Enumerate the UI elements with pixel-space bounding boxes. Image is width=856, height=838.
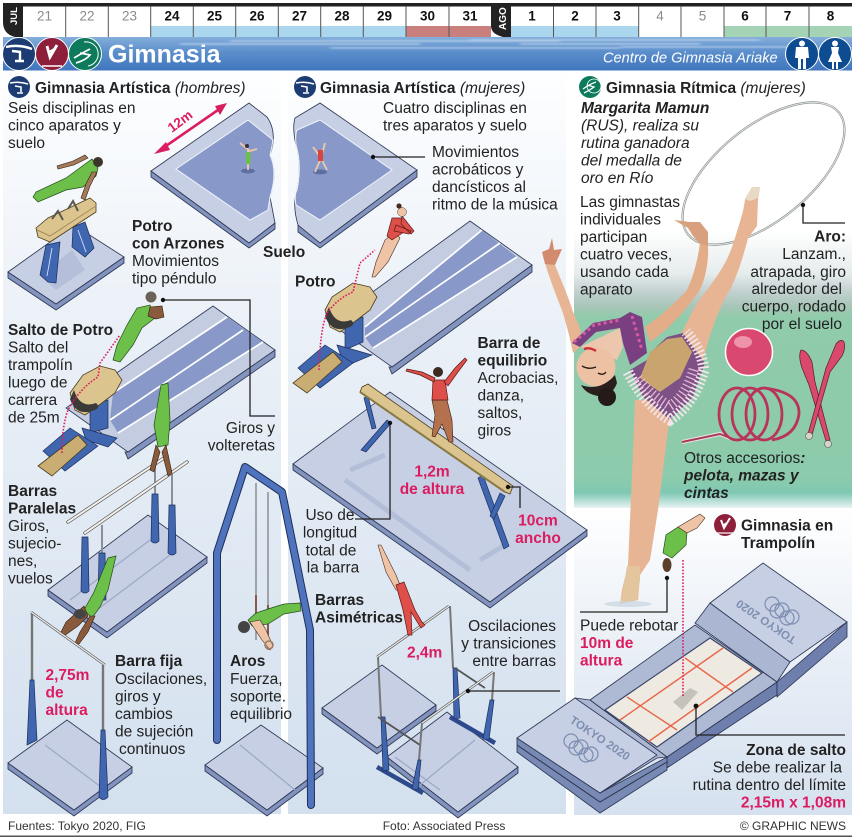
floor note: acrobáticos y bbox=[432, 162, 524, 178]
label: high bar: Oscilaciones, bbox=[115, 671, 207, 688]
hoop label: atrapada, giro bbox=[750, 264, 846, 281]
accessories text: Otros accesorios: bbox=[684, 450, 805, 467]
date calendar strip bbox=[3, 3, 852, 37]
icon: rhythmic badge bbox=[68, 38, 102, 70]
raised arm bbox=[645, 243, 708, 342]
label: jump zone: rutina dentro del límite bbox=[693, 777, 846, 794]
intro text: Cuatro disciplinas en bbox=[383, 100, 527, 117]
label: vault: Potro bbox=[295, 274, 335, 290]
label: beam: saltos, bbox=[478, 405, 522, 422]
date calendar strip: AGO bbox=[498, 7, 509, 30]
label: jump zone: Se debe realizar la bbox=[713, 760, 842, 776]
men's vault illustration bbox=[38, 292, 275, 476]
label: 2,75m: 2,75m bbox=[46, 667, 89, 684]
trampoline illustration bbox=[517, 514, 847, 813]
rings illustration bbox=[205, 467, 323, 816]
date calendar strip: 31 bbox=[462, 8, 478, 24]
label: beam: danza, bbox=[478, 388, 524, 405]
bed bbox=[605, 638, 762, 747]
label: vault: Salto del bbox=[8, 340, 68, 357]
label: bar length: longitud bbox=[303, 525, 357, 542]
intro text: suelo bbox=[8, 135, 45, 152]
frame bbox=[667, 682, 777, 768]
heading: Gimnasia Artística (hombres) bbox=[35, 80, 246, 97]
panel: trampoline bbox=[517, 514, 847, 813]
date calendar strip: 23 bbox=[122, 8, 137, 24]
floor note: dancísticos al bbox=[432, 179, 526, 196]
end block: far bbox=[695, 563, 847, 697]
athlete text: Las gimnastas bbox=[580, 194, 680, 211]
label: vault: de 25m bbox=[8, 410, 60, 427]
label: bar length: Uso de bbox=[305, 507, 355, 524]
hoop label: cuerpo, rodado bbox=[742, 299, 846, 316]
gymnast bbox=[240, 143, 257, 170]
other arm bbox=[545, 263, 582, 353]
gymnast bbox=[372, 203, 414, 277]
panel: women's artistic gymnastics bbox=[263, 76, 587, 818]
photo credit: Foto: Associated Press bbox=[383, 819, 505, 833]
date calendar strip: 2 bbox=[571, 8, 579, 24]
label: beam: Acrobacias, bbox=[478, 370, 558, 387]
athlete credit: (RUS), realiza su bbox=[581, 118, 699, 135]
date calendar strip: 4 bbox=[656, 8, 664, 24]
date calendar strip: 27 bbox=[292, 8, 307, 24]
icon: artistic men badge bbox=[2, 38, 36, 70]
handstand gymnast bbox=[150, 383, 172, 476]
athlete text: participan bbox=[580, 229, 647, 246]
standing leg bbox=[620, 400, 673, 604]
label: twists: Giros y bbox=[226, 420, 275, 437]
date calendar strip: 24 bbox=[164, 8, 180, 24]
date calendar strip: JUL bbox=[9, 7, 20, 25]
label: uneven bars: Asimétricas bbox=[315, 610, 403, 627]
label: rings: Fuerza, bbox=[230, 671, 283, 688]
connector: width bbox=[506, 485, 520, 508]
floor note: Movimientos bbox=[432, 144, 519, 161]
label: beam: Barra de bbox=[478, 335, 540, 352]
face bbox=[576, 348, 616, 386]
raised leg bbox=[682, 187, 760, 360]
hoop label: por el suelo bbox=[762, 316, 842, 333]
athlete text: individuales bbox=[580, 212, 661, 228]
gymnast bbox=[313, 143, 327, 172]
title band bbox=[2, 37, 852, 70]
uneven bars illustration bbox=[322, 545, 560, 818]
footer bbox=[0, 819, 852, 837]
gymnast bbox=[378, 545, 425, 635]
label: parallel bars: nes, bbox=[8, 553, 37, 570]
label: vault: luego de bbox=[8, 375, 67, 392]
women's vault illustration bbox=[293, 203, 532, 393]
label: beam: giros bbox=[478, 423, 511, 440]
connector: rebound bbox=[580, 576, 669, 612]
end block: near: TOKYO 2020 bbox=[567, 715, 632, 763]
connector: jump zone bbox=[694, 704, 845, 735]
label: rebound: altura bbox=[580, 653, 623, 670]
label: high bar: de sujeción bbox=[115, 724, 193, 740]
label: rebound: Puede rebotar bbox=[580, 618, 678, 635]
gymnast bbox=[33, 155, 103, 202]
icon: women's heading badge bbox=[294, 76, 316, 98]
date calendar strip: 6 bbox=[741, 8, 749, 24]
icon: ribbon bbox=[682, 388, 799, 442]
label: rebound: 10m de bbox=[580, 635, 634, 652]
hoop bbox=[659, 76, 856, 271]
label: beam: equilibrio bbox=[478, 353, 547, 370]
connector: bar length bbox=[355, 421, 392, 519]
icon: men's heading badge bbox=[8, 76, 30, 98]
label: 2,75m: altura bbox=[46, 702, 88, 719]
label: bar length: la barra bbox=[307, 560, 360, 577]
title: Gimnasia bbox=[108, 41, 222, 69]
uneven bars note: y transiciones bbox=[461, 636, 556, 653]
label: jump zone: Zona de salto bbox=[746, 742, 846, 759]
label: parallel bars: vuelos bbox=[8, 570, 53, 588]
connector bbox=[466, 689, 560, 693]
label: floor: Suelo bbox=[263, 244, 305, 261]
heading: Gimnasia Artística (mujeres) bbox=[320, 80, 525, 97]
label: jump zone: 2,15m x 1,08m bbox=[741, 794, 846, 812]
label: 2,4m: 2,4m bbox=[407, 645, 442, 662]
balance beam illustration bbox=[293, 358, 587, 608]
athlete text: usando cada bbox=[580, 264, 669, 281]
label: high bar: cambios bbox=[115, 706, 173, 723]
label: vault: carrera bbox=[8, 392, 57, 409]
floor exercise mat bbox=[294, 103, 425, 248]
label: 1,2m: de altura bbox=[400, 481, 465, 498]
gymnast bbox=[406, 358, 467, 442]
heading: Gimnasia en bbox=[741, 518, 833, 535]
hoop label: Lanzam., bbox=[782, 246, 846, 263]
hoop label: Aro: bbox=[814, 229, 846, 246]
label: 10cm: 10cm bbox=[518, 513, 558, 530]
sources: Fuentes: Tokyo 2020, FIG bbox=[8, 819, 146, 833]
end block: near bbox=[517, 698, 667, 813]
athlete text: cuatro veces, bbox=[580, 246, 672, 264]
gymnast bbox=[662, 514, 705, 572]
panel: rhythmic gymnastics bbox=[542, 76, 856, 607]
date calendar strip: 1 bbox=[528, 8, 536, 24]
label: parallel bars: Barras bbox=[8, 483, 57, 500]
heading: Trampolín bbox=[741, 535, 815, 552]
icon: clubs bbox=[800, 340, 845, 448]
icon: rhythmic heading badge bbox=[579, 76, 601, 98]
gymnast photo figure bbox=[542, 187, 760, 607]
venue: Centro de Gimnasia Ariake bbox=[603, 51, 778, 67]
label: rings: equilibrio bbox=[230, 706, 292, 723]
arrow: 12m: 12m bbox=[165, 107, 195, 135]
label: uneven bars: Barras bbox=[315, 592, 364, 609]
gymnast bbox=[238, 603, 301, 650]
parallel bars illustration bbox=[48, 383, 207, 644]
shoe bbox=[620, 566, 640, 604]
date calendar strip: 21 bbox=[37, 8, 52, 24]
label: high bar: giros y bbox=[115, 688, 161, 706]
accessories text: cintas bbox=[684, 485, 729, 502]
date calendar strip: 28 bbox=[334, 8, 350, 24]
date calendar strip: 29 bbox=[377, 8, 392, 24]
date calendar strip: 22 bbox=[79, 8, 95, 24]
intro text: Seis disciplinas en bbox=[8, 100, 136, 117]
hair bbox=[581, 375, 617, 396]
hoop label: alrededor del bbox=[752, 281, 842, 298]
label: parallel bars: sujecio- bbox=[8, 536, 61, 552]
label: bar length: total de bbox=[306, 542, 356, 559]
label: vault: Salto de Potro bbox=[8, 322, 113, 339]
uneven bars note: Oscilaciones bbox=[468, 618, 556, 635]
athlete credit: del medalla de bbox=[581, 153, 682, 170]
heading: Gimnasia Rítmica (mujeres) bbox=[606, 80, 806, 97]
label: parallel bars: Paralelas bbox=[8, 500, 76, 518]
athlete credit: oro en Río bbox=[581, 170, 654, 187]
icon: trampoline badge bbox=[714, 514, 736, 536]
date calendar strip: 5 bbox=[699, 8, 706, 24]
label: pommel: Movimientos bbox=[132, 253, 219, 270]
icon: ball bbox=[726, 328, 772, 376]
skirt bbox=[628, 332, 705, 420]
label: parallel bars: Giros, bbox=[8, 518, 49, 535]
label: rings: soporte. bbox=[230, 688, 286, 706]
label: 2,75m: de bbox=[46, 684, 64, 702]
connector: hoop bbox=[801, 203, 845, 223]
date calendar strip: 3 bbox=[613, 8, 621, 24]
date calendar strip: 26 bbox=[249, 8, 265, 24]
high bar illustration bbox=[8, 612, 132, 816]
icon: women bbox=[818, 38, 852, 70]
copyright: © GRAPHIC NEWS bbox=[740, 819, 846, 833]
label: high bar: continuos bbox=[119, 741, 186, 758]
gymnast bbox=[113, 292, 164, 362]
athlete credit: rutina ganadora bbox=[581, 135, 690, 152]
date calendar strip: 7 bbox=[784, 8, 791, 24]
athlete text: aparato bbox=[580, 282, 633, 298]
label: 1,2m: 1,2m bbox=[414, 464, 450, 481]
pommel horse illustration bbox=[8, 155, 124, 310]
end block: far: TOKYO 2020 bbox=[734, 597, 799, 645]
intro text: cinco aparatos y bbox=[8, 118, 121, 134]
accessories text: pelota, mazas y bbox=[683, 468, 800, 485]
label: 10cm: ancho bbox=[515, 530, 561, 547]
uneven bars note: entre barras bbox=[472, 653, 556, 670]
label: pommel: tipo péndulo bbox=[132, 270, 216, 288]
chest bbox=[580, 328, 623, 360]
label: pommel: con Arzones bbox=[132, 236, 224, 252]
label: vault: trampolín bbox=[8, 357, 73, 374]
floor exercise mat bbox=[151, 103, 275, 248]
bodice bbox=[572, 312, 647, 365]
label: high bar: Barra fija bbox=[115, 653, 182, 670]
gymnast on high bar bbox=[60, 556, 116, 644]
intro text: tres aparatos y suelo bbox=[383, 118, 527, 134]
date calendar strip: 30 bbox=[420, 8, 435, 24]
date calendar strip: 8 bbox=[827, 8, 835, 24]
trajectory bbox=[682, 560, 684, 697]
connector bbox=[371, 155, 425, 159]
arrow: 12m bbox=[154, 103, 227, 154]
floor note: ritmo de la música bbox=[432, 196, 558, 214]
athlete credit: Margarita Mamun bbox=[581, 100, 709, 117]
label: rings: Aros bbox=[230, 653, 265, 670]
icon: men bbox=[786, 38, 818, 70]
label: pommel: Potro bbox=[132, 218, 172, 235]
date calendar strip: 25 bbox=[207, 8, 222, 24]
panel: men's artistic gymnastics bbox=[8, 76, 323, 816]
connector: twists bbox=[161, 298, 275, 416]
label: twists: volteretas bbox=[208, 438, 275, 455]
icon: trampoline badge bbox=[36, 38, 68, 70]
